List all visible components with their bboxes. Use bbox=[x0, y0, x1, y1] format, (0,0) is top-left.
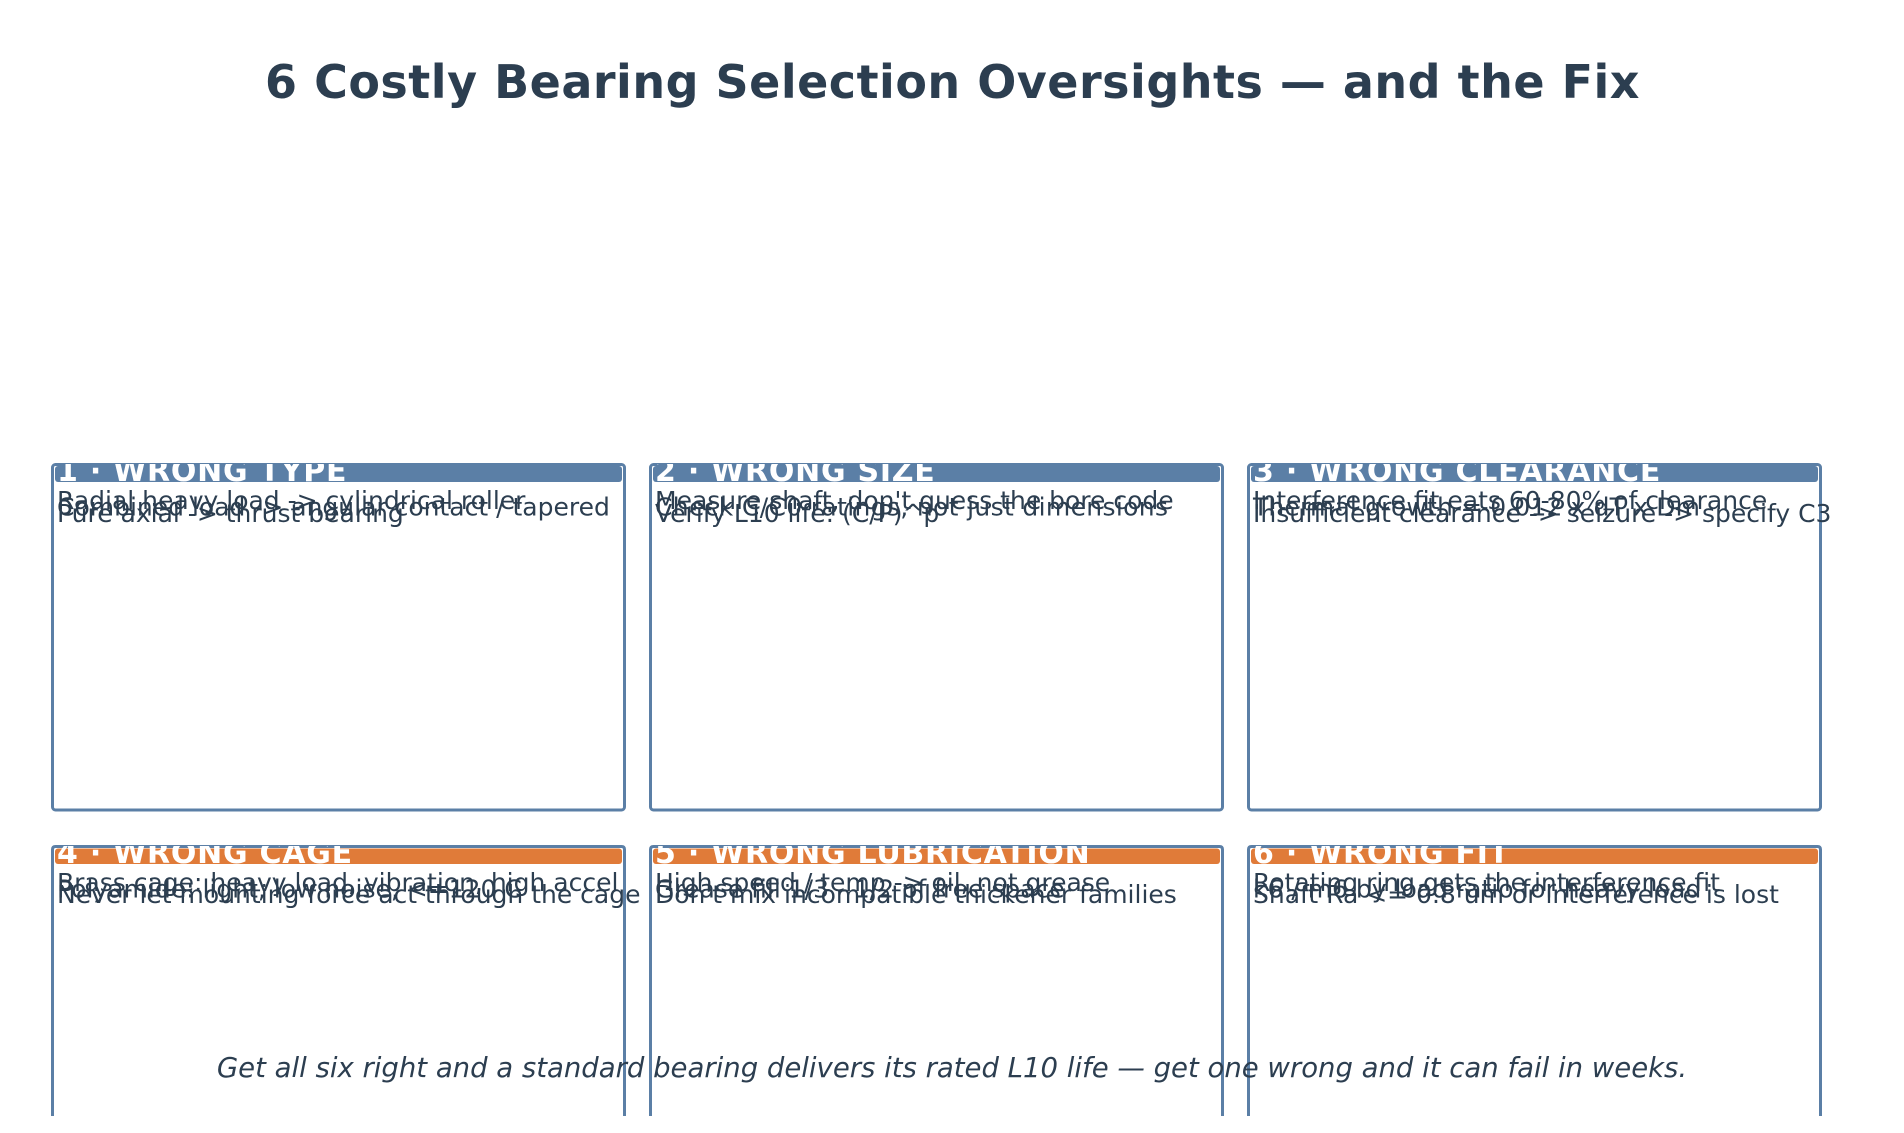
text: wrong size fixes: Measure shaft, don't guess the bore code bbox=[655, 486, 1174, 515]
text: wrong cage fixes: Polyamide: light, low noise, <=120 C bbox=[57, 874, 522, 904]
text: wrong lubrication fixes: Don't mix incompatible thickener families bbox=[655, 880, 1177, 909]
text: wrong type fixes: Combined load -> angular contact / tapered bbox=[57, 492, 610, 522]
text: wrong cage fixes: Never let mounting force act through the cage bbox=[57, 880, 640, 909]
text: wrong fit fixes: Shaft Ra <= 0.8 um or interference is lost bbox=[1253, 880, 1779, 909]
text: wrong fit fixes: Rotating ring gets the interference fit bbox=[1253, 868, 1720, 897]
text: wrong size fixes bbox=[655, 486, 1174, 528]
text: wrong fit fixes: k6 / m6 by load ratio for heavy load bbox=[1253, 874, 1701, 904]
text: wrong clearance fixes: Interference fit eats 60-80% of clearance bbox=[1253, 486, 1767, 515]
heading: wrong type: 1 · WRONG TYPE bbox=[57, 454, 347, 489]
text: wrong size fixes: Verify L10 life: (C/P)^p bbox=[655, 499, 939, 528]
panel: wrong clearance bbox=[1248, 454, 1831, 810]
panel: wrong fit bbox=[1248, 836, 1820, 1116]
panel: wrong lubrication bbox=[650, 836, 1222, 1116]
panel: wrong size bbox=[650, 454, 1222, 810]
text: wrong clearance fixes: Insufficient clearance -> seizure -> specify C3 bbox=[1253, 499, 1831, 528]
heading: wrong size: 2 · WRONG SIZE bbox=[655, 454, 936, 489]
text: wrong clearance fixes: Thermal growth = 0.012 x dT x Dm bbox=[1252, 492, 1700, 522]
heading: wrong fit: 6 · WRONG FIT bbox=[1253, 836, 1510, 871]
panel: wrong cage bbox=[52, 836, 640, 1116]
text: wrong lubrication fixes: High speed / temp -> oil, not grease bbox=[655, 868, 1110, 897]
panel: wrong type bbox=[52, 454, 624, 810]
heading: wrong lubrication: 5 · WRONG LUBRICATION bbox=[655, 836, 1090, 871]
text: wrong type fixes: Pure axial -> thrust bearing bbox=[57, 499, 404, 528]
title: 6 Costly Bearing Selection Oversights — and the Fix bbox=[265, 55, 1640, 109]
heading: wrong cage: 4 · WRONG CAGE bbox=[57, 836, 353, 871]
text: wrong type fixes: Radial heavy load -> cylindrical roller bbox=[57, 486, 526, 515]
footer note: Get all six right and a standard bearing delivers its rated L10 life — get one wrong and it can fail in weeks. bbox=[217, 1052, 1687, 1084]
text: wrong cage fixes: Brass cage: heavy load, vibration, high accel bbox=[57, 868, 618, 897]
text: wrong lubrication fixes: Grease fill 1/3 - 1/2 of free space bbox=[655, 874, 1065, 904]
heading: wrong clearance: 3 · WRONG CLEARANCE bbox=[1253, 454, 1661, 489]
text: wrong type fixes bbox=[57, 486, 610, 528]
text: wrong clearance fixes bbox=[1252, 486, 1831, 528]
text: wrong size fixes: Check C/C0 ratings, not just dimensions bbox=[655, 492, 1168, 522]
